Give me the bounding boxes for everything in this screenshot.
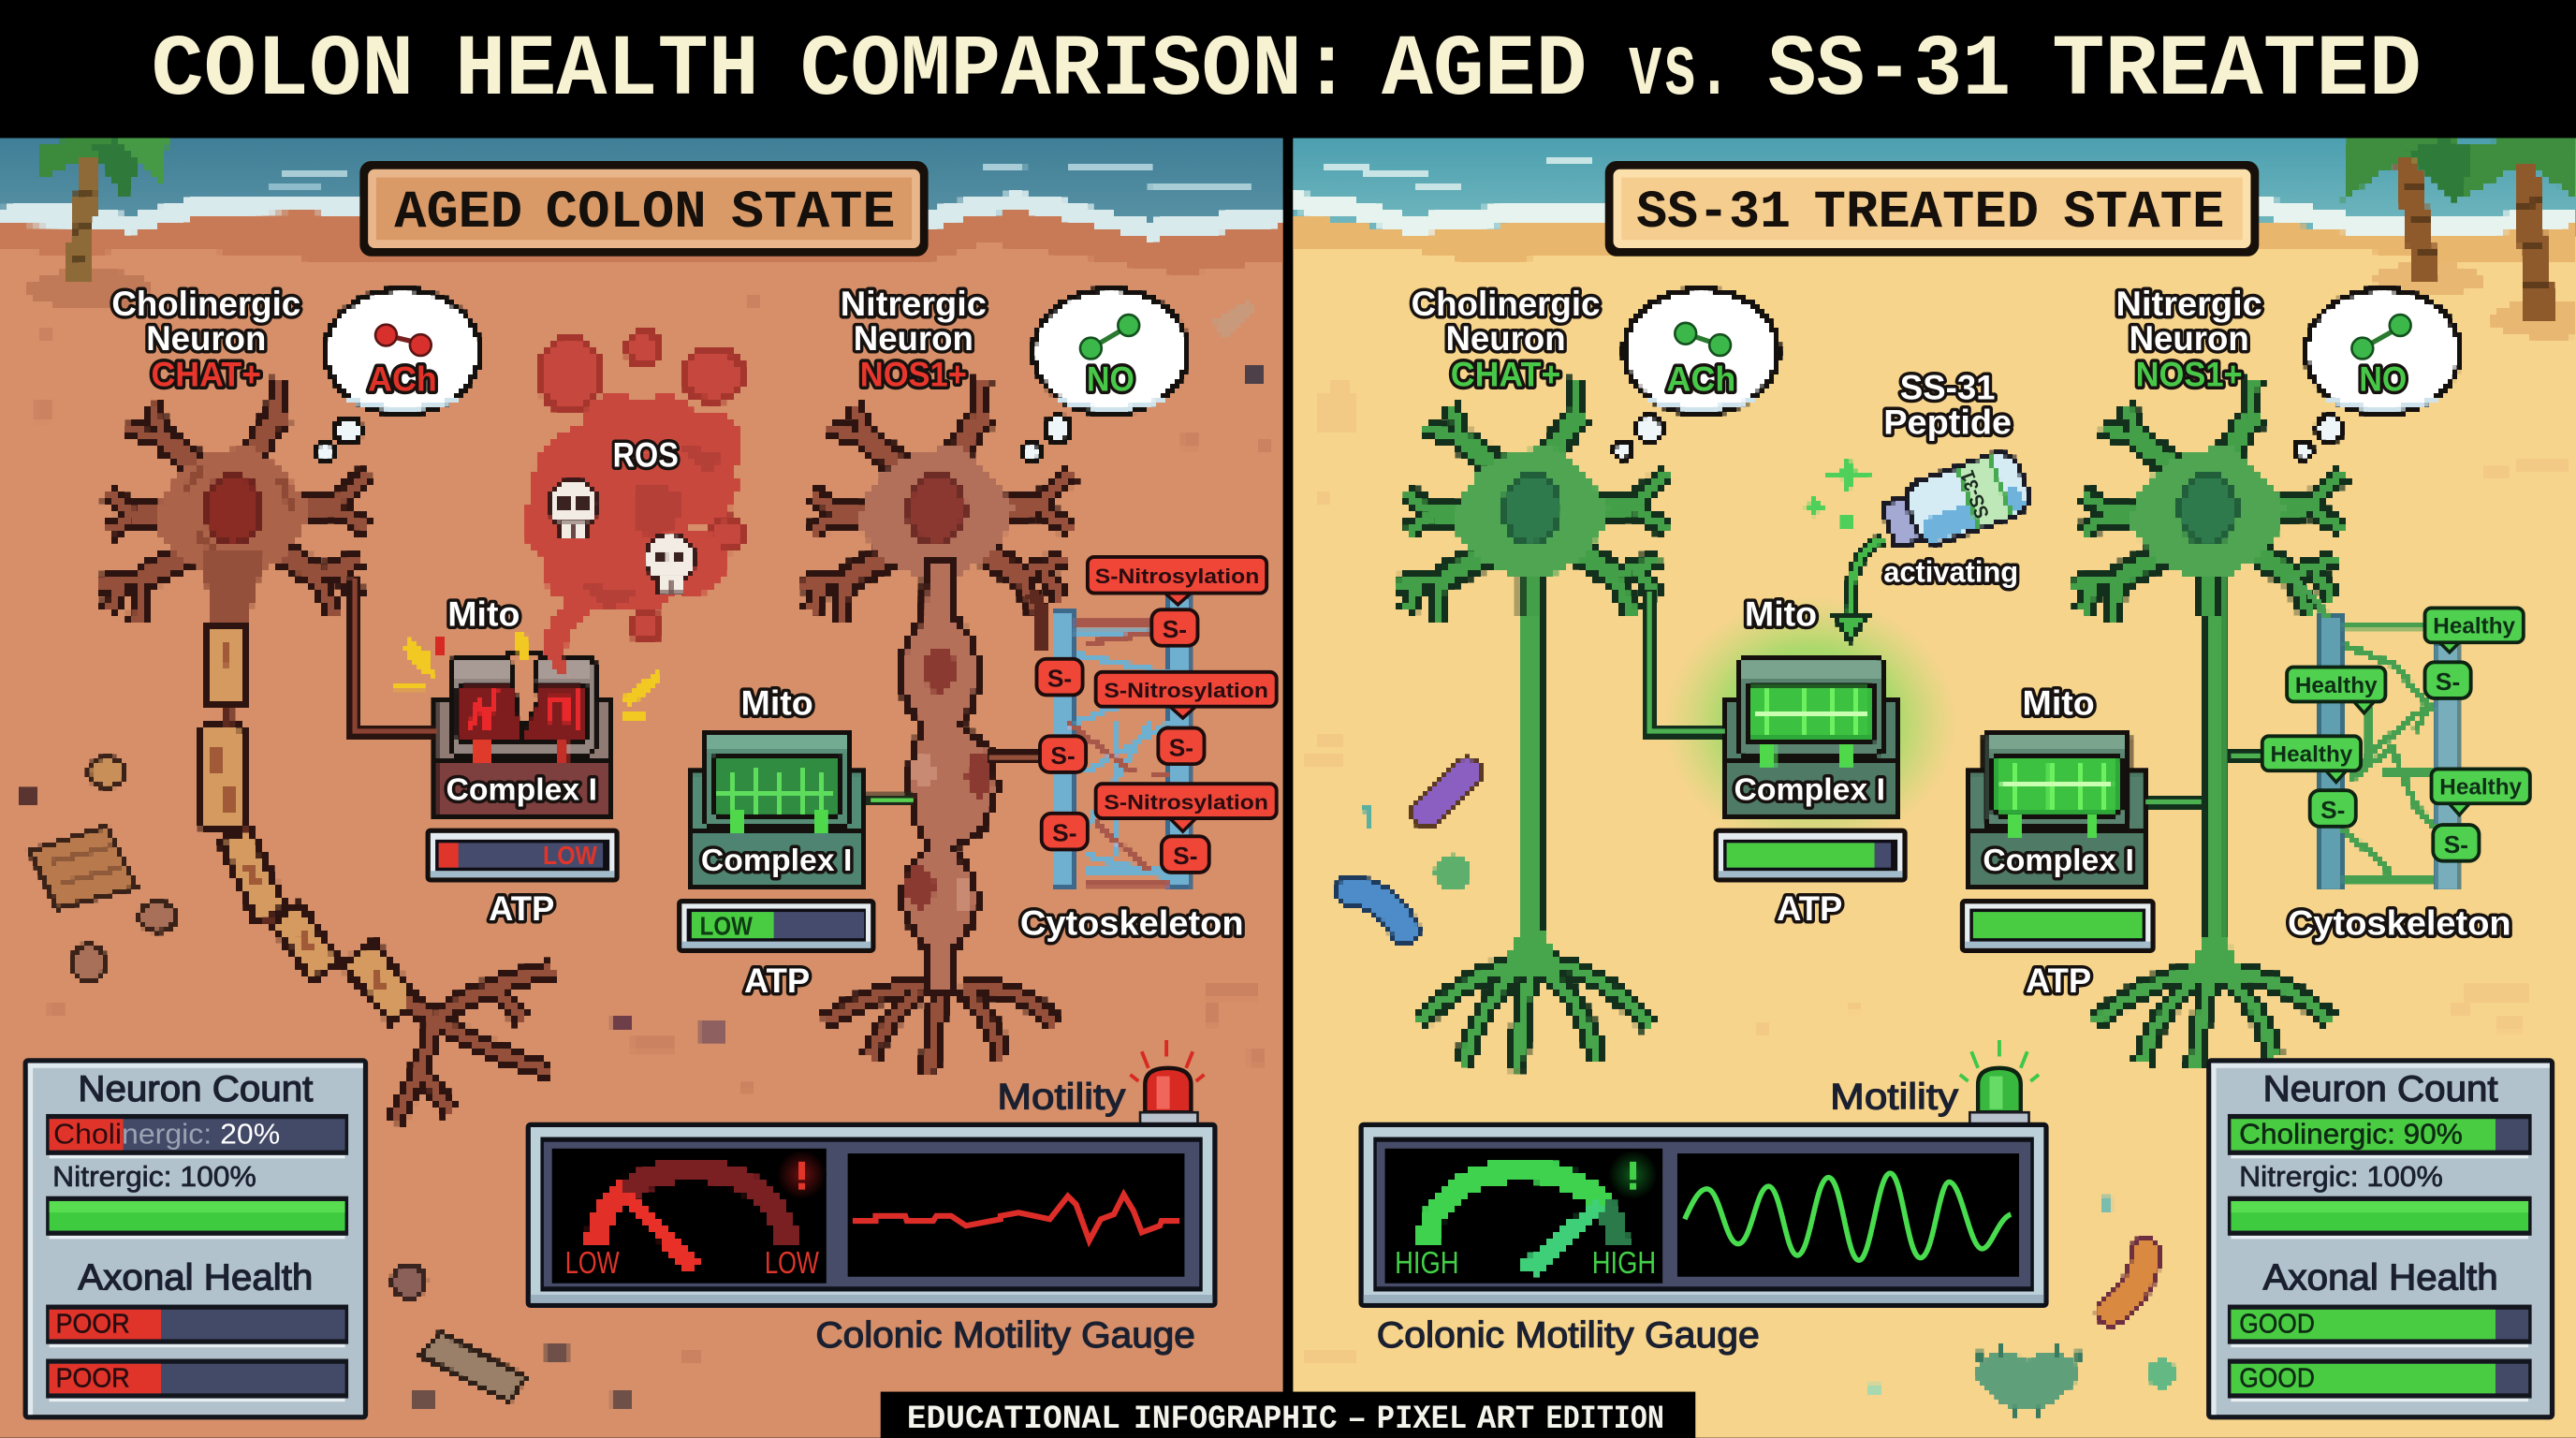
label: ROS: ROS xyxy=(613,435,679,474)
S- site green 3: S- xyxy=(2444,830,2468,858)
thought bubble ACh treated xyxy=(1614,289,1778,460)
label: colonic motility gauge treated: Colonic Motility Gauge xyxy=(1377,1315,1760,1356)
connector: cholinergic neuron to mito xyxy=(355,579,444,731)
title xyxy=(151,22,2422,120)
S- site green 1: S- xyxy=(2436,668,2460,696)
stats panel aged xyxy=(23,1058,368,1419)
header bar xyxy=(0,0,2576,138)
ACh molecule and label: ACh xyxy=(368,360,437,399)
title: TREATED xyxy=(2052,22,2422,120)
bar: cholinergic 90% xyxy=(2228,1114,2532,1158)
connector: axon to cytoskeleton xyxy=(986,754,1042,762)
label: cholinergic neuron treated: CHAT+ xyxy=(1451,355,1560,393)
glow around mito xyxy=(1662,594,1958,851)
panel heading: SS-31 treated state: TREATED xyxy=(1814,183,2039,242)
mito machine treated 2 xyxy=(1969,731,2144,888)
S- site 1 xyxy=(1151,609,1197,646)
bar: poor 2: POOR xyxy=(56,1363,130,1393)
bar: cholinergic 90%: Cholinergic: 90% xyxy=(2239,1118,2463,1151)
stats panel treated xyxy=(2206,1058,2554,1419)
bottle label text: SS-31 xyxy=(1956,467,1994,521)
nitrergic neuron treated xyxy=(2073,378,2343,1068)
tag: S-Nitrosylation 2: S-Nitrosylation xyxy=(1104,679,1268,702)
bar: nitrergic 100% treated xyxy=(2228,1196,2532,1239)
label: motility treated: Motility xyxy=(1830,1078,1959,1118)
panel: aged colon state xyxy=(0,138,1283,1438)
S- site 2 xyxy=(1036,659,1083,695)
fragmented axon aged xyxy=(200,624,417,1022)
tag: healthy 4: Healthy xyxy=(2439,776,2523,800)
label: nitrergic neuron: NOS1+ xyxy=(860,355,967,393)
label: mito 2: Mito xyxy=(741,683,813,722)
panel heading: aged colon state: COLON xyxy=(546,183,707,242)
label: cholinergic neuron treated: Cholinergic xyxy=(1412,285,1600,323)
ATP bar low green xyxy=(677,899,875,953)
thought bubble NO treated xyxy=(2294,289,2460,460)
aged pixel art layer coarse xyxy=(0,138,1283,1360)
heading: axonal health treated: Axonal Health xyxy=(2263,1258,2498,1299)
tag: healthy 3 xyxy=(2262,736,2361,782)
motility monitor aged xyxy=(526,1123,1218,1308)
connector: mito to beaded axon xyxy=(868,797,914,804)
label: complex I broken: Complex I xyxy=(446,773,597,808)
mito machine aged green xyxy=(690,731,864,888)
sparks xyxy=(394,631,661,721)
tag: S-Nitrosylation 1: S-Nitrosylation xyxy=(1095,565,1259,588)
label: mito treated 2: Mito xyxy=(2023,683,2095,722)
S- site green 3 xyxy=(2433,825,2479,861)
gauge arc aged xyxy=(596,1170,787,1275)
ATP bar high 2 xyxy=(1960,899,2156,953)
ACh molecule and label treated: ACh xyxy=(1667,360,1735,399)
motility monitor treated xyxy=(1358,1123,2049,1308)
label: nitrergic neuron treated: NOS1+ xyxy=(2136,355,2243,393)
S- site 5 xyxy=(1042,814,1088,849)
label: activating: activating xyxy=(1883,554,2018,588)
bar: good 2 xyxy=(2228,1358,2532,1401)
label: cytoskeleton treated: Cytoskeleton xyxy=(2288,904,2511,943)
aged sand background xyxy=(0,138,1283,1438)
label: SS-31 peptide xyxy=(1883,368,2012,441)
panel: SS-31 treated state xyxy=(1293,138,2576,1438)
label: cytoskeleton: Cytoskeleton xyxy=(1020,904,1244,943)
tag: S-Nitrosylation 3: S-Nitrosylation xyxy=(1104,790,1268,814)
footer tab: PIXEL xyxy=(1377,1401,1467,1438)
gauge screen treated: HIGH xyxy=(1592,1246,1656,1281)
S- site 6 xyxy=(1162,836,1209,873)
treated pixel art layer fine xyxy=(1351,289,2460,1416)
NO molecule and label xyxy=(1080,315,1139,399)
NO molecule and label: NO xyxy=(1087,360,1134,399)
treated sand patches xyxy=(1301,381,2569,1360)
panel heading: aged colon state: STATE xyxy=(731,183,896,242)
label: nitrergic 100%: Nitrergic: 100% xyxy=(52,1160,256,1193)
NO molecule and label treated xyxy=(2351,315,2411,399)
tag: healthy 2 xyxy=(2287,668,2385,713)
connector highlights treated xyxy=(1649,592,2264,801)
gauge screen treated: HIGH xyxy=(1395,1246,1459,1281)
S- site green 2: S- xyxy=(2320,796,2345,824)
footer tab: – xyxy=(1347,1401,1367,1438)
title: AGED xyxy=(1382,22,1587,120)
ROS cloud xyxy=(522,332,742,657)
treated cytoskeleton lattice xyxy=(2291,575,2458,889)
heading: neuron count treated: Neuron Count xyxy=(2263,1069,2498,1109)
label: complex I aged green: Complex I xyxy=(701,844,852,878)
tag: healthy 4 xyxy=(2432,769,2530,815)
skull 2 xyxy=(646,534,695,594)
gauge screen: LOW xyxy=(565,1246,620,1281)
label: nitrergic 100% treated: Nitrergic: 100% xyxy=(2239,1160,2443,1193)
connector: cholinergic neuron to mito treated xyxy=(1649,592,1728,731)
waveform screen xyxy=(848,1153,1184,1277)
aged sand speckles xyxy=(37,296,1270,1360)
label: nitrergic neuron treated: Nitrergic xyxy=(2116,285,2262,323)
axon terminal branches aged xyxy=(394,970,553,1123)
label: cholinergic neuron treated xyxy=(1412,285,1600,393)
cholinergic neuron treated xyxy=(1398,378,1667,1071)
bar: poor 2 xyxy=(46,1358,348,1401)
aged shoreline xyxy=(0,161,1283,274)
label: complex I treated 1: Complex I xyxy=(1734,773,1885,808)
tag: healthy 3: Healthy xyxy=(2271,742,2353,767)
ATP bar low red xyxy=(426,829,620,882)
label: complex I treated 2: Complex I xyxy=(1983,844,2134,878)
gauge arc treated xyxy=(1427,1170,1617,1275)
footer tab: ART xyxy=(1477,1401,1534,1438)
aged pixel art layer fine xyxy=(20,289,1265,1410)
heading: axonal health: Axonal Health xyxy=(78,1258,313,1299)
S- site green 2 xyxy=(2310,790,2356,827)
treated sand background xyxy=(1293,138,2576,1438)
aged cytoskeleton lattice xyxy=(1032,592,1190,888)
label: colonic motility gauge aged: Colonic Motility Gauge xyxy=(815,1315,1195,1356)
S- site 1: S- xyxy=(1163,615,1187,643)
ATP bar low red: LOW xyxy=(543,841,597,870)
gauge screen: LOW xyxy=(765,1246,819,1281)
bar: good 1: GOOD xyxy=(2239,1309,2315,1339)
label: ATP treated 2: ATP xyxy=(2026,961,2091,1000)
tag: S-Nitrosylation 1 xyxy=(1088,557,1266,605)
label: SS-31 peptide: SS-31 xyxy=(1900,368,1996,406)
label: ATP 1: ATP xyxy=(489,889,554,928)
label: motility: Motility xyxy=(997,1078,1126,1118)
tag: healthy 2: Healthy xyxy=(2295,674,2378,698)
label: SS-31 peptide: Peptide xyxy=(1883,403,2012,441)
label: ATP treated 1: ATP xyxy=(1777,889,1842,928)
label: mito treated 1: Mito xyxy=(1745,595,1817,634)
label: ATP 2: ATP xyxy=(744,961,810,1000)
thought bubble NO xyxy=(1023,289,1188,461)
label: nitrergic neuron treated: Neuron xyxy=(2130,319,2249,358)
bar: good 2: GOOD xyxy=(2239,1363,2315,1393)
center divider xyxy=(1283,138,1293,1438)
treated shoreline xyxy=(1293,157,2576,263)
cholinergic neuron aged xyxy=(98,378,368,627)
connector highlights aged xyxy=(355,579,1038,800)
bacteria and debris treated xyxy=(1351,772,2177,1416)
sparkles xyxy=(1799,452,1871,529)
panel heading: SS-31 treated state: STATE xyxy=(2063,183,2224,242)
panel heading: aged colon state: AGED xyxy=(394,183,522,242)
debris xyxy=(20,301,1265,1410)
label: cholinergic neuron: Neuron xyxy=(146,319,266,358)
label: cholinergic neuron treated: Neuron xyxy=(1445,319,1566,358)
footer tab: EDITION xyxy=(1546,1401,1664,1438)
S- site 4: S- xyxy=(1169,733,1193,761)
S- site 3 xyxy=(1040,736,1086,772)
panel heading: SS-31 treated state: SS-31 xyxy=(1636,183,1791,242)
S- site 4 xyxy=(1158,728,1204,764)
arrow: activating xyxy=(1834,539,1882,640)
ATP bar high 1 xyxy=(1714,829,1908,882)
title: COLON xyxy=(151,22,414,120)
label: nitrergic neuron xyxy=(841,285,987,393)
title: COMPARISON: xyxy=(800,22,1352,120)
thought bubble ACh xyxy=(316,289,479,461)
label: mito 1: Mito xyxy=(447,595,520,634)
S- site 2: S- xyxy=(1047,665,1072,693)
tag: healthy 1: Healthy xyxy=(2433,615,2516,639)
title: SS-31 xyxy=(1767,22,2011,120)
label: cholinergic neuron xyxy=(111,285,300,393)
tag: healthy 1 xyxy=(2425,608,2524,653)
label: cholinergic neuron: Cholinergic xyxy=(111,285,300,323)
S- site 6: S- xyxy=(1173,842,1197,870)
title: HEALTH xyxy=(455,22,759,120)
bar: poor 1: POOR xyxy=(56,1309,130,1339)
palm trees right xyxy=(2343,138,2576,339)
bar: cholinergic 20% xyxy=(46,1114,348,1158)
label: nitrergic neuron: Neuron xyxy=(854,319,973,358)
gauge screen xyxy=(552,1149,827,1284)
connector: mito to nitrergic axon xyxy=(2143,798,2204,805)
label: nitrergic neuron treated xyxy=(2116,285,2262,393)
tag: S-Nitrosylation 3 xyxy=(1096,784,1277,831)
tag: S-Nitrosylation 2 xyxy=(1096,672,1277,718)
ATP bar low green: LOW xyxy=(700,912,753,941)
S- site 5: S- xyxy=(1052,819,1076,847)
bottle SS-31 peptide xyxy=(1878,448,2034,558)
heading: neuron count: Neuron Count xyxy=(78,1069,314,1109)
label: cholinergic neuron: CHAT+ xyxy=(151,355,261,393)
panel heading: SS-31 treated state xyxy=(1605,161,2259,257)
treated pixel art layer coarse xyxy=(1293,138,2576,1360)
nitrergic neuron aged xyxy=(801,378,1071,1077)
S- site 3: S- xyxy=(1050,741,1076,770)
label: nitrergic neuron: Nitrergic xyxy=(841,285,987,323)
waveform screen treated xyxy=(1677,1153,2019,1277)
bar: good 1 xyxy=(2228,1305,2532,1347)
S- site green 1 xyxy=(2425,662,2471,698)
icon: red siren xyxy=(1131,1040,1204,1123)
footer tab: INFOGRAPHIC xyxy=(1134,1401,1338,1438)
palm tree left xyxy=(28,138,168,309)
ACh molecule and label treated xyxy=(1667,323,1735,399)
connector: nitrergic axon to cytoskeleton xyxy=(2228,752,2267,759)
ACh molecule and label xyxy=(368,325,437,399)
skull 1 xyxy=(549,479,598,539)
gauge screen treated xyxy=(1385,1149,1662,1284)
treated sea xyxy=(1293,138,2576,237)
panel heading: aged colon state xyxy=(359,161,929,257)
bar: nitrergic 100% xyxy=(46,1196,348,1239)
broken mito machine xyxy=(435,651,609,815)
footer tab: EDUCATIONAL xyxy=(907,1401,1120,1438)
footer tab xyxy=(881,1392,1695,1438)
aged sea xyxy=(0,138,1283,237)
bar: cholinergic 20%: Cholinergic: 20% xyxy=(53,1118,280,1151)
title: vs. xyxy=(1628,22,1732,120)
icon: green siren xyxy=(1960,1040,2039,1123)
NO molecule and label treated: NO xyxy=(2359,360,2407,399)
mito machine treated 1 xyxy=(1723,659,1897,815)
bar: poor 1 xyxy=(46,1305,348,1347)
